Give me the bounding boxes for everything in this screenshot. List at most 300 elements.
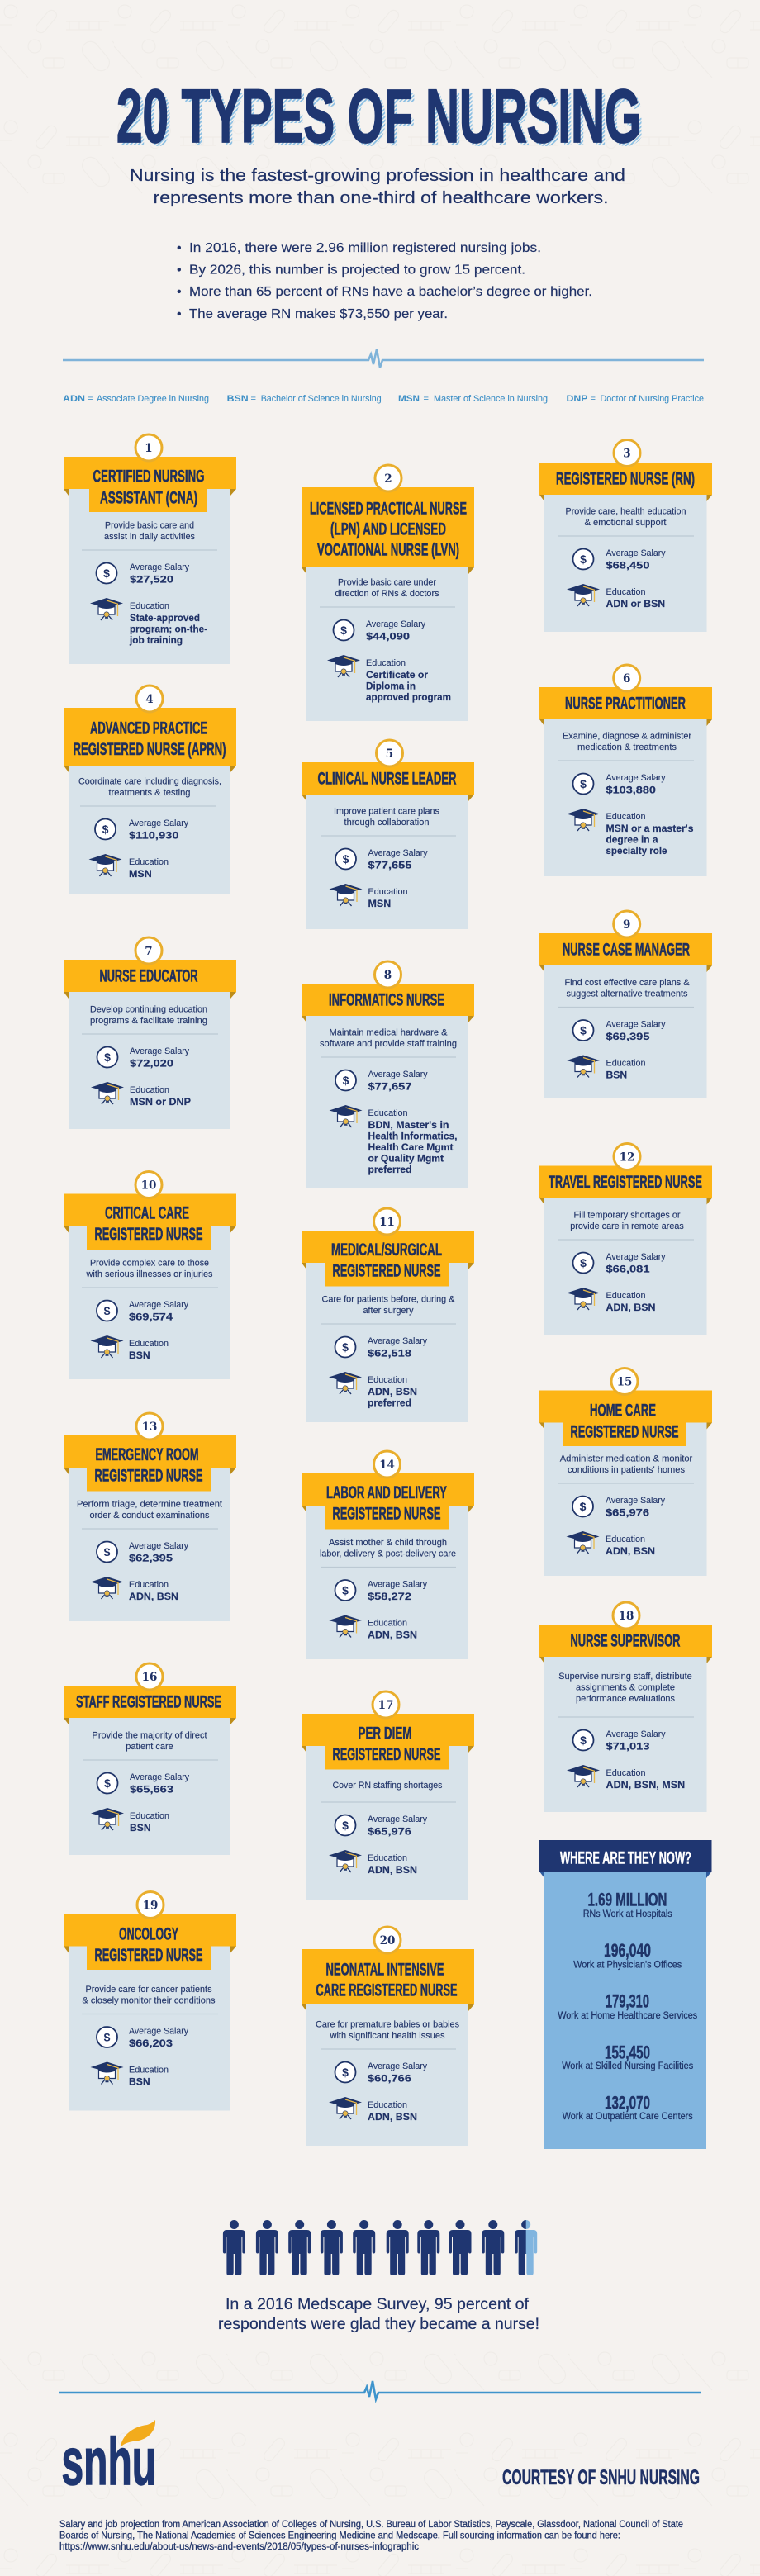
details (321, 806, 456, 909)
card 20: neonatal intensive care registered nurse: 20 (380, 1934, 395, 1947)
banner (302, 487, 474, 567)
details: Education (129, 1580, 169, 1590)
card 7: nurse educator (64, 937, 236, 1129)
key facts list: More than 65 percent of RNs have a bachelor’s degree or higher. (189, 285, 592, 299)
sources: Salary and job projection from American Association of Colleges of Nursing, U.S. Bureau of Labor Statistics, Payscale, Glassdoor, National Council of State (59, 2520, 683, 2530)
details: Administer medication & monitor (560, 1454, 693, 1464)
logo: snhu (61, 2420, 156, 2499)
details: Education (368, 1375, 407, 1385)
details: ADN, BSN (606, 1302, 656, 1313)
card 1: certified nursing assistant (64, 434, 236, 664)
details: $68,450 (606, 560, 650, 572)
details: Education (130, 601, 169, 611)
card 11: medical surgical registered nurse (302, 1208, 474, 1422)
details: Education (366, 658, 406, 668)
banner (302, 984, 474, 1016)
details: Provide care, health education (565, 507, 686, 517)
details (316, 2020, 459, 2123)
details: programs & facilitate training (90, 1016, 207, 1026)
details: Diploma in (366, 681, 416, 692)
details: Education (129, 1339, 169, 1349)
key facts list: The average RN makes $73,550 per year. (189, 307, 448, 321)
card 13: emergency room registered nurse (64, 1413, 236, 1621)
details: Education (368, 887, 408, 897)
details: Find cost effective care plans & (565, 978, 690, 988)
card 19: oncology registered nurse: 19 (143, 1900, 158, 1913)
card 20: neonatal intensive care registered nurse (302, 1927, 474, 2146)
details: Average Salary (130, 1772, 189, 1782)
details: Education (606, 587, 646, 597)
sources: https://www.snhu.edu/about-us/news-and-events/2018/05/types-of-nurses-infographic (59, 2542, 419, 2552)
details: State-approved (130, 612, 200, 624)
degree legend: Bachelor of Science in Nursing (261, 394, 382, 404)
details: Average Salary (129, 2027, 188, 2037)
card 14: labor and delivery registered nurse: 14 (379, 1459, 395, 1472)
card 1: certified nursing assistant: CERTIFIED NURSING (93, 467, 205, 486)
details: BSN (130, 1822, 151, 1834)
details: Maintain medical hardware & (329, 1027, 448, 1037)
card 10: critical care registered nurse: 10 (141, 1179, 156, 1193)
details: & emotional support (585, 518, 666, 528)
card 12: travel registered nurse (539, 1143, 712, 1335)
details: Average Salary (129, 1541, 188, 1551)
details: Education (606, 812, 646, 822)
details: Develop continuing education (90, 1004, 207, 1014)
details: preferred (368, 1164, 411, 1175)
details: Education (606, 1291, 646, 1301)
key facts list: • (177, 285, 182, 299)
sources: Boards of Nursing, The National Academies of Sciences Engineering Medicine and Medscape. Full sourcing information can be found here: (59, 2531, 620, 2541)
stat: hospitals: RNs Work at Hospitals (583, 1909, 672, 1919)
survey statement: respondents were glad they became a nurse! (218, 2316, 539, 2333)
details: ADN, BSN (368, 1386, 417, 1397)
card 1: certified nursing assistant: 1 (145, 442, 153, 455)
degree legend: = (88, 394, 93, 404)
details: Education (368, 2100, 407, 2110)
card 16: staff registered nurse: STAFF REGISTERED NURSE (76, 1693, 221, 1711)
card 19: oncology registered nurse (64, 1891, 236, 2111)
banner (64, 708, 236, 766)
card 19: oncology registered nurse: ONCOLOGY (119, 1924, 178, 1944)
card 11: medical surgical registered nurse: REGISTERED NURSE (332, 1262, 441, 1280)
details: Education (130, 1085, 169, 1095)
details: MSN or DNP (130, 1096, 191, 1108)
card 19: oncology registered nurse: REGISTERED NURSE (94, 1946, 203, 1965)
stat: hospitals: 1.69 MILLION (588, 1890, 667, 1909)
card 2: licensed practical nurse: 2 (384, 472, 392, 486)
degree legend (63, 394, 704, 404)
details: patient care (126, 1742, 173, 1752)
details: $110,930 (129, 829, 179, 841)
details: Average Salary (368, 1815, 427, 1824)
subtitle (130, 167, 625, 207)
subtitle: Nursing is the fastest-growing profession in healthcare and (130, 167, 625, 185)
details: treatments & testing (109, 788, 190, 798)
details: Education (130, 1811, 169, 1821)
icon row: 95 percent of people (223, 2220, 537, 2275)
card 7: nurse educator: NURSE EDUCATOR (99, 966, 198, 986)
details: with serious illnesses or injuries (86, 1269, 213, 1279)
details: Average Salary (366, 619, 425, 629)
details: MSN (129, 868, 152, 880)
details: BDN, Master's in (368, 1119, 449, 1131)
card 17: per diem registered nurse: PER DIEM (359, 1724, 411, 1743)
details: Average Salary (129, 1300, 188, 1310)
details: $69,395 (606, 1031, 650, 1042)
card 9: nurse case manager (539, 911, 712, 1098)
stat: hospitals (583, 1890, 672, 1919)
banner (539, 1166, 712, 1198)
details: ADN, BSN (129, 1591, 178, 1602)
card 18: nurse supervisor: NURSE SUPERVISOR (570, 1632, 681, 1650)
details: ADN or BSN (606, 598, 665, 610)
details: $ (580, 1024, 587, 1037)
stat: outpatient (563, 2093, 693, 2122)
details: ADN, BSN (368, 1629, 417, 1640)
card 15: home care registered nurse: HOME CARE (590, 1401, 656, 1421)
details (82, 1985, 218, 2088)
degree legend: = (590, 394, 596, 404)
details (78, 776, 221, 880)
details (83, 1731, 218, 1834)
details: $ (343, 852, 349, 866)
degree legend: Master of Science in Nursing (434, 394, 548, 404)
details: performance evaluations (576, 1694, 675, 1704)
details: Provide basic care under (338, 578, 436, 588)
card 5: clinical nurse leader (302, 740, 474, 929)
details: $58,272 (368, 1591, 411, 1602)
card 14: labor and delivery registered nurse (302, 1451, 474, 1659)
details: $65,663 (130, 1784, 173, 1796)
banner (539, 463, 712, 495)
degree legend: DNP (567, 394, 588, 404)
card 6: nurse practitioner (539, 665, 712, 876)
card 11: medical surgical registered nurse: 11 (379, 1216, 395, 1229)
details (320, 1027, 458, 1175)
details: $ (342, 1819, 349, 1832)
banner (539, 1625, 712, 1657)
card 15: home care registered nurse: 15 (617, 1376, 632, 1389)
stat: skilled nursing: 155,450 (605, 2042, 650, 2063)
details: provide care in remote areas (570, 1222, 684, 1231)
card 15: home care registered nurse: REGISTERED NURSE (570, 1422, 679, 1442)
card 16: staff registered nurse: 16 (142, 1671, 157, 1684)
details (558, 978, 694, 1080)
details: $103,880 (606, 785, 656, 796)
degree legend: MSN (398, 394, 420, 404)
details: labor, delivery & post-delivery care (320, 1549, 456, 1559)
details: $ (104, 1304, 111, 1317)
stat: home healthcare (558, 1990, 697, 2021)
details: Education (368, 1619, 407, 1629)
details: $ (580, 1500, 587, 1513)
details: $ (580, 777, 587, 790)
details: Average Salary (606, 548, 666, 558)
stat: outpatient: Work at Outpatient Care Centers (563, 2112, 693, 2122)
details: $71,013 (606, 1741, 650, 1753)
card 14: labor and delivery registered nurse: REGISTERED NURSE (332, 1505, 441, 1523)
details: Average Salary (606, 773, 666, 783)
banner (302, 1949, 474, 2004)
details (82, 1004, 218, 1108)
details: Care for premature babies or babies (316, 2020, 459, 2030)
details: Average Salary (368, 1336, 427, 1346)
card 15: home care registered nurse (539, 1368, 712, 1576)
details: Provide complex care to those (90, 1259, 209, 1269)
degree legend: Doctor of Nursing Practice (600, 394, 704, 404)
card 6: nurse practitioner: 6 (623, 672, 630, 686)
panel heading (539, 1840, 712, 1878)
details: Provide care for cancer patients (86, 1985, 212, 1995)
details: Perform triage, determine treatment (77, 1500, 222, 1510)
details: Certificate or (366, 669, 428, 681)
details: Average Salary (368, 848, 428, 858)
details: job training (129, 634, 183, 646)
details: after surgery (363, 1306, 414, 1316)
details: Average Salary (130, 562, 189, 572)
details: preferred (368, 1397, 411, 1409)
details (320, 578, 455, 703)
details: direction of RNs & doctors (335, 589, 439, 599)
details: Supervise nursing staff, distribute (558, 1672, 692, 1682)
details: MSN (368, 898, 391, 909)
details: $ (104, 1777, 111, 1790)
card 4: advanced practice registered nurse: REGISTERED NURSE (APRN) (73, 740, 226, 759)
details: Fill temporary shortages or (573, 1211, 681, 1221)
details: Provide the majority of direct (93, 1731, 207, 1741)
card 18: nurse supervisor (539, 1602, 712, 1812)
degree legend: ADN (63, 394, 85, 404)
card 5: clinical nurse leader: 5 (386, 747, 393, 761)
card 3: registered nurse: 3 (623, 448, 631, 461)
details: Education (606, 1768, 646, 1778)
details: $ (342, 1340, 349, 1354)
stat: physician offices (573, 1940, 682, 1971)
details: $ (104, 1545, 111, 1558)
details: assist in daily activities (104, 532, 195, 542)
details: $44,090 (366, 631, 410, 643)
details: Provide basic care and (105, 520, 194, 530)
banner (539, 1391, 712, 1446)
details: $27,520 (130, 573, 173, 585)
details: MSN or a master's (606, 823, 694, 834)
details: with significant health issues (329, 2031, 445, 2041)
details (558, 507, 694, 610)
banner (64, 1435, 236, 1492)
details (558, 1672, 694, 1791)
details: Average Salary (606, 1019, 666, 1029)
survey statement: In a 2016 Medscape Survey, 95 percent of (226, 2296, 530, 2313)
details: $65,976 (368, 1825, 411, 1837)
details: $ (103, 567, 110, 580)
card 18: nurse supervisor: 18 (619, 1610, 634, 1623)
details: $77,657 (368, 1080, 412, 1092)
card 20: neonatal intensive care registered nurse: NEONATAL INTENSIVE (325, 1961, 444, 1979)
card 8: informatics nurse: 8 (384, 969, 392, 982)
details: Average Salary (606, 1729, 666, 1739)
details: conditions in patients' homes (568, 1465, 686, 1475)
details: medication & treatments (577, 742, 677, 752)
card 14: labor and delivery registered nurse: LABOR AND DELIVERY (326, 1483, 447, 1502)
card 2: licensed practical nurse: VOCATIONAL NURSE (LVN) (317, 540, 459, 560)
details (320, 1538, 456, 1640)
details: suggest alternative treatments (567, 989, 688, 999)
card 13: emergency room registered nurse: REGISTERED NURSE (94, 1467, 203, 1485)
card 17: per diem registered nurse: 17 (378, 1699, 393, 1712)
card 20: neonatal intensive care registered nurse: CARE REGISTERED NURSE (316, 1981, 458, 2000)
stat: home healthcare: Work at Home Healthcare Services (558, 2011, 697, 2021)
subtitle: represents more than one-third of healthcare workers. (154, 189, 608, 207)
details: $77,655 (368, 859, 412, 871)
card 12: travel registered nurse: 12 (620, 1151, 634, 1165)
details: $66,081 (606, 1264, 650, 1275)
key facts list: By 2026, this number is projected to grow 15 percent. (189, 263, 525, 278)
details: order & conduct examinations (89, 1511, 210, 1520)
details: $ (580, 553, 587, 566)
details (558, 732, 694, 856)
details: program; on-the- (130, 623, 207, 634)
details: BSN (129, 2076, 150, 2088)
card 1: certified nursing assistant: ASSISTANT (CNA) (100, 489, 197, 507)
details (321, 1295, 456, 1409)
survey statement (218, 2296, 539, 2333)
banner (64, 457, 236, 512)
details: Examine, diagnose & administer (563, 732, 691, 742)
banner (64, 1686, 236, 1718)
banner (539, 687, 712, 719)
details: $72,020 (130, 1057, 173, 1069)
details: degree in a (606, 834, 658, 846)
card 8: informatics nurse: INFORMATICS NURSE (329, 991, 444, 1009)
details: $ (580, 1256, 587, 1269)
card 11: medical surgical registered nurse: MEDICAL/SURGICAL (331, 1241, 442, 1260)
stat: skilled nursing: Work at Skilled Nursing Facilities (562, 2061, 693, 2071)
details: $66,203 (129, 2038, 173, 2049)
card 7: nurse educator: 7 (145, 945, 153, 958)
heartbeat divider (59, 2381, 701, 2399)
stat: physician offices: Work at Physician's Offices (573, 1961, 682, 1971)
key facts list: In 2016, there were 2.96 million registered nursing jobs. (189, 241, 541, 255)
details: ADN, BSN, MSN (606, 1779, 685, 1791)
details: Coordinate care including diagnosis, (78, 776, 221, 786)
details: $62,518 (368, 1348, 411, 1359)
banner (64, 1194, 236, 1250)
details: Average Salary (130, 1046, 189, 1056)
key facts list: • (177, 241, 182, 255)
banner (302, 762, 474, 795)
banner (302, 1714, 474, 1769)
card 5: clinical nurse leader: CLINICAL NURSE LEADER (317, 770, 456, 788)
details: Average Salary (606, 1496, 665, 1506)
sources (59, 2520, 683, 2552)
details: Education (129, 857, 169, 867)
details: or Quality Mgmt (368, 1153, 444, 1165)
banner (539, 933, 712, 965)
key facts list: • (177, 307, 182, 321)
details: BSN (129, 1350, 150, 1361)
details (82, 520, 217, 646)
details: BSN (606, 1069, 627, 1080)
card 3: registered nurse (539, 439, 712, 632)
details: $ (343, 1074, 349, 1087)
stat: physician offices: 196,040 (604, 1940, 651, 1961)
details: $60,766 (368, 2073, 411, 2085)
details: Education (606, 1535, 645, 1544)
details: Education (368, 1108, 408, 1118)
details: $69,574 (129, 1312, 173, 1323)
details: Assist mother & child through (329, 1538, 447, 1548)
card 10: critical care registered nurse: CRITICAL CARE (105, 1204, 189, 1222)
card 4: advanced practice registered nurse (64, 686, 236, 894)
card 13: emergency room registered nurse: 13 (142, 1421, 157, 1434)
details: $ (342, 2066, 349, 2079)
card 2: licensed practical nurse (302, 465, 474, 721)
card 2: licensed practical nurse: (LPN) AND LICENSED (330, 520, 446, 538)
stat: outpatient: 132,070 (605, 2093, 650, 2113)
details: $ (340, 624, 347, 637)
details: Education (129, 2065, 169, 2075)
key facts list: • (177, 263, 182, 278)
details (321, 1781, 456, 1876)
banner (302, 1473, 474, 1530)
details: through collaboration (344, 818, 430, 828)
stat: home healthcare: 179,310 (606, 1990, 649, 2012)
details: Education (606, 1059, 646, 1069)
details: $62,395 (129, 1553, 173, 1564)
details: ADN, BSN (606, 1545, 655, 1557)
details (558, 1454, 694, 1557)
degree legend: = (251, 394, 256, 404)
details: $ (580, 1734, 587, 1747)
banner (64, 1914, 236, 1970)
card 4: advanced practice registered nurse: 4 (145, 693, 154, 706)
card 16: staff registered nurse (64, 1663, 236, 1855)
card 8: informatics nurse (302, 961, 474, 1188)
card 6: nurse practitioner: NURSE PRACTITIONER (565, 694, 686, 714)
details: Care for patients before, during & (322, 1295, 455, 1305)
details: Average Salary (368, 2061, 427, 2071)
details: Health Care Mgmt (368, 1141, 453, 1153)
details: approved program (366, 691, 451, 703)
degree legend: Associate Degree in Nursing (97, 394, 209, 404)
details (82, 1259, 218, 1361)
details: Improve patient care plans (334, 806, 439, 816)
stat: skilled nursing (562, 2042, 693, 2071)
details: ADN, BSN (368, 2111, 417, 2123)
details: $ (104, 2030, 111, 2043)
card 9: nurse case manager: 9 (623, 918, 630, 932)
degree legend: BSN (227, 394, 249, 404)
card 2: licensed practical nurse: LICENSED PRACTICAL NURSE (310, 499, 467, 519)
degree legend: = (423, 394, 429, 404)
details (77, 1500, 222, 1602)
details (558, 1211, 694, 1313)
details: Education (368, 1853, 407, 1863)
key facts list (177, 241, 592, 321)
details: assignments & complete (576, 1683, 675, 1693)
banner (64, 960, 236, 992)
details: Average Salary (606, 1252, 666, 1262)
details: Cover RN staffing shortages (332, 1781, 443, 1791)
details: $65,976 (606, 1506, 649, 1518)
details: Average Salary (129, 818, 188, 828)
card 17: per diem registered nurse: REGISTERED NURSE (332, 1745, 441, 1764)
details: Average Salary (368, 1579, 427, 1589)
details: Health Informatics, (368, 1130, 458, 1141)
card 10: critical care registered nurse: REGISTERED NURSE (94, 1225, 203, 1244)
details: specialty role (606, 845, 667, 856)
details: $ (342, 1584, 349, 1597)
